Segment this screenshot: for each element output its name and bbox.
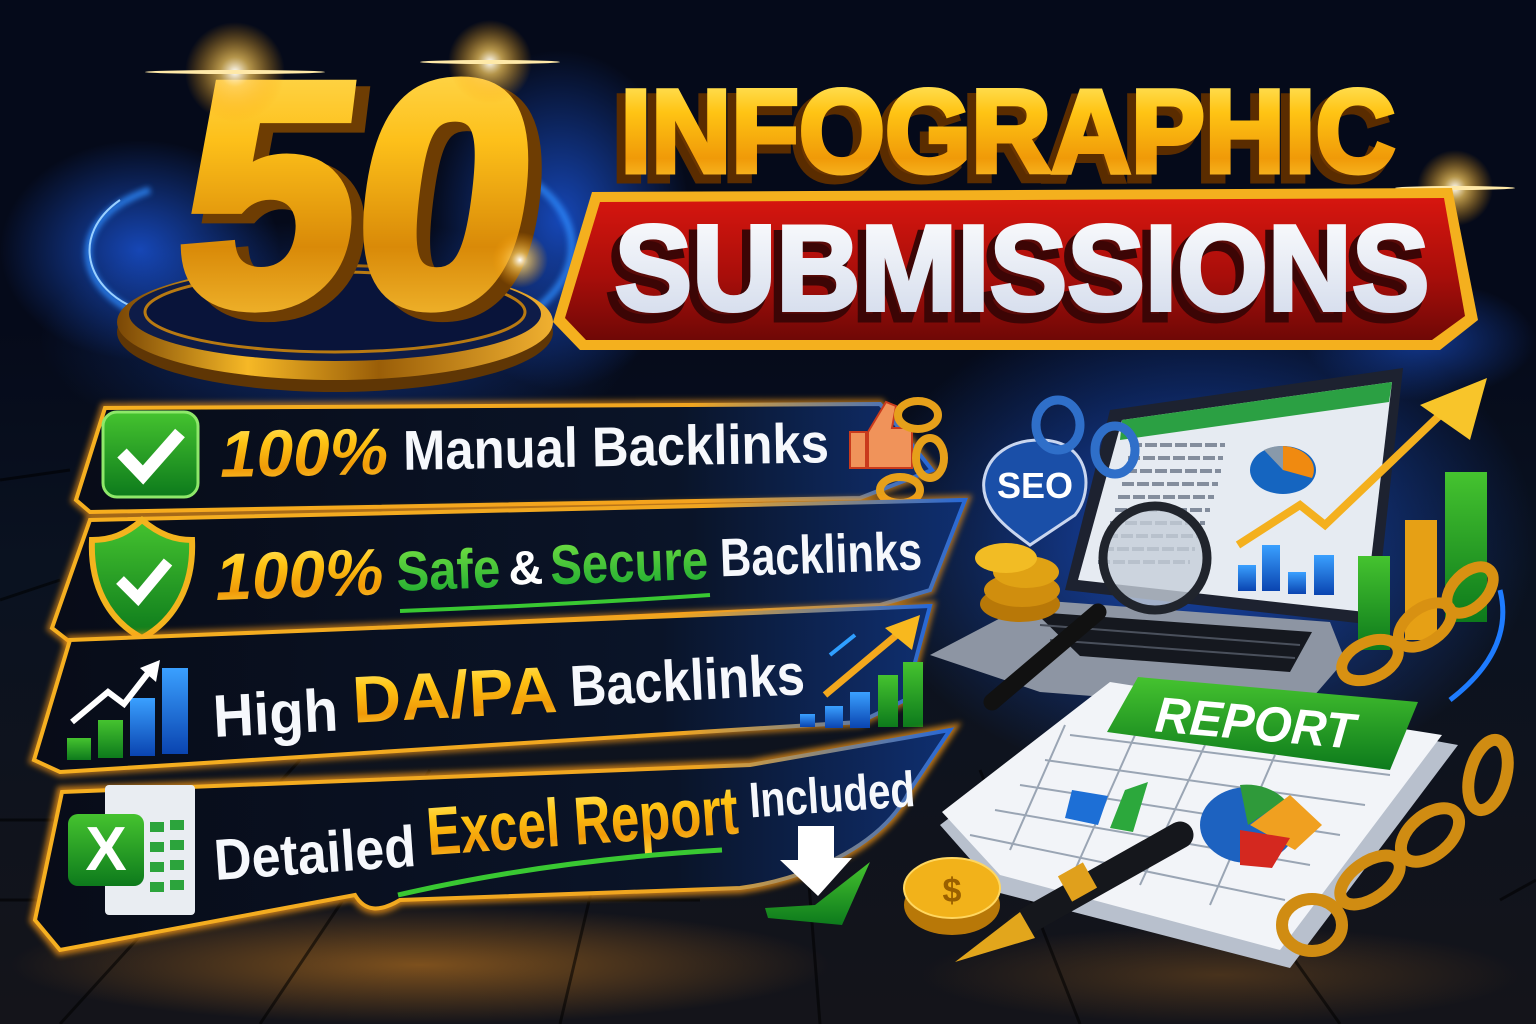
coins: $ — [943, 872, 962, 910]
text: detailed excel report included: Included — [747, 761, 917, 828]
pen — [955, 835, 1180, 962]
illustration: laptop dashboard — [930, 368, 1502, 712]
panel: detailed excel report — [35, 730, 950, 950]
text: high DA/PA backlinks: High — [211, 677, 340, 750]
flare at title corner — [1395, 150, 1515, 226]
title: INFOGRAPHIC: INFOGRAPHIC — [620, 66, 1396, 198]
number 50: 50 — [174, 24, 567, 380]
title banner: SUBMISSIONS: SUBMISSIONS — [608, 208, 1424, 344]
icon: arrow and check — [765, 826, 870, 925]
underline — [398, 850, 722, 895]
text: high DA/PA backlinks: Backlinks — [568, 642, 806, 719]
text: 100% safe and secure backlinks: Secure — [549, 528, 709, 596]
report banner — [1107, 677, 1418, 770]
hero: gold 50 on pedestal — [88, 16, 572, 392]
text: 100% safe and secure backlinks: Safe — [395, 536, 501, 603]
sheet bars — [1065, 782, 1148, 832]
icon: excel sheet — [68, 785, 195, 915]
illustration: report documents — [904, 590, 1515, 968]
text: 100% manual backlinks: 100% — [219, 414, 389, 491]
keyboard — [1035, 612, 1312, 672]
icon: green check — [103, 412, 198, 497]
panel: manual backlinks — [76, 401, 944, 512]
coins — [975, 543, 1060, 622]
magnifying glass — [992, 506, 1207, 702]
screen bars — [1238, 545, 1334, 595]
pie chart — [1250, 446, 1316, 494]
number 50: 50 — [162, 16, 555, 372]
text: 100% manual backlinks: Manual Backlinks — [402, 411, 829, 482]
sheet pie — [1200, 785, 1322, 868]
sheet — [940, 685, 1458, 968]
underline — [400, 595, 710, 611]
icon: growth chart — [67, 660, 188, 760]
icon: thumb and chain — [850, 401, 944, 503]
laptop base — [930, 600, 1345, 712]
rising arrow — [1238, 415, 1440, 545]
laptop screen — [1065, 368, 1403, 625]
text: high DA/PA backlinks — [211, 639, 807, 750]
icon: arrow up with bars — [800, 615, 923, 728]
pedestal — [117, 264, 553, 392]
chain — [1282, 736, 1515, 951]
flares — [145, 20, 560, 288]
chain right — [1335, 558, 1502, 689]
glow ring — [1450, 590, 1503, 700]
swirl lines — [88, 180, 572, 330]
panel: safe and secure backlinks — [52, 500, 965, 642]
title: INFOGRAPHIC: INFOGRAPHIC — [614, 73, 1388, 205]
text: detailed excel report included — [211, 760, 919, 893]
text: 100% safe and secure backlinks: 100% — [214, 534, 385, 614]
text: 100% safe and secure backlinks: Backlinks — [719, 521, 923, 588]
text: 100% safe and secure backlinks: & — [507, 542, 544, 596]
SEO tag — [984, 400, 1135, 545]
text: detailed excel report included: Detailed — [212, 814, 418, 893]
green bars — [1358, 472, 1487, 650]
illustration: report documents: REPORT — [1153, 686, 1362, 760]
panel: high DA/PA backlinks — [34, 606, 930, 772]
icon: excel sheet: X — [85, 815, 127, 884]
coins — [904, 858, 1000, 935]
text: detailed excel report included: Excel Report — [424, 772, 741, 870]
title banner: SUBMISSIONS: SUBMISSIONS — [614, 200, 1430, 336]
text: high DA/PA backlinks: DA/PA — [350, 652, 559, 737]
text: 100% manual backlinks — [219, 406, 830, 491]
text: 100% safe and secure backlinks — [214, 515, 923, 614]
SEO tag: SEO — [997, 465, 1073, 506]
icon: shield check — [92, 520, 192, 638]
